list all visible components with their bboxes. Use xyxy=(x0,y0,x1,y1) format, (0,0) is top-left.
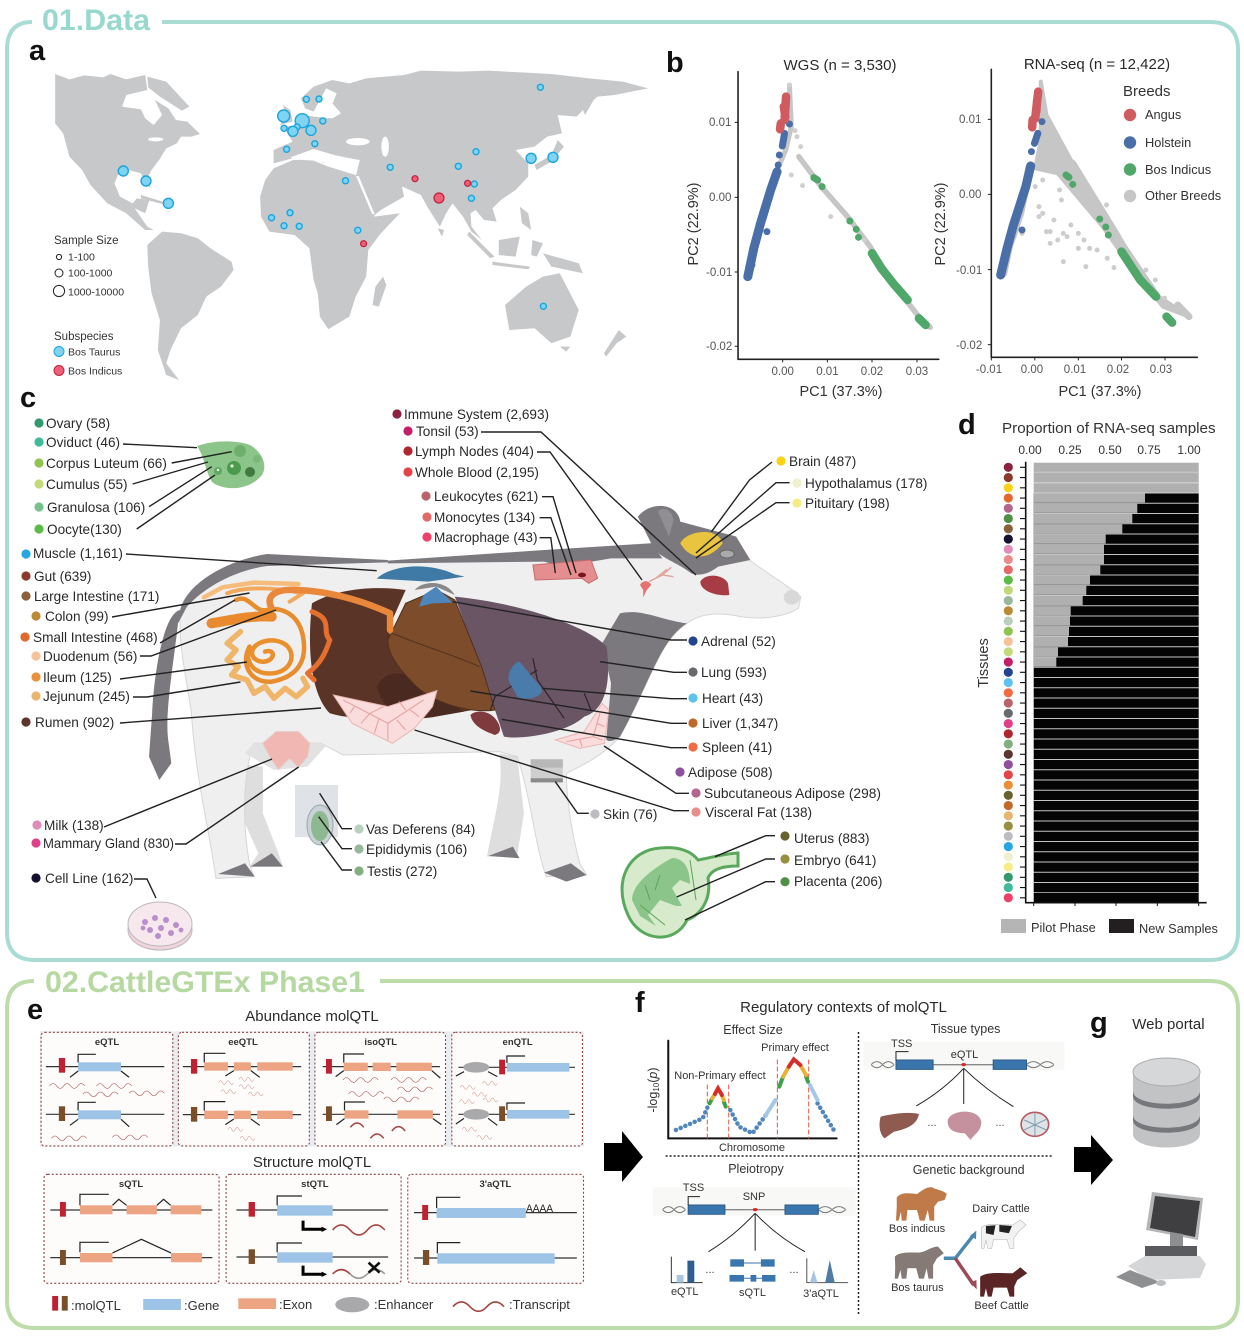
sub-panel: Tissue types: TSS xyxy=(891,1038,912,1050)
sub-panel: Tissue types: ... xyxy=(927,1117,937,1129)
label: Small Intestine: Small Intestine (468) xyxy=(33,630,158,645)
legend: breeds: Angus xyxy=(1145,107,1181,122)
box: isoQTL xyxy=(315,1032,446,1146)
legend: pilot and new samples xyxy=(1001,919,1218,936)
label: Jejunum: Jejunum (245) xyxy=(43,689,130,704)
label: Monocytes: Monocytes (134) xyxy=(434,510,535,525)
panel letter c: c xyxy=(20,382,36,414)
brain xyxy=(680,532,723,556)
box: eQTL xyxy=(41,1032,173,1146)
legend: sample size: Sample Size xyxy=(54,235,119,247)
cow body xyxy=(180,523,801,878)
WGS points and axes xyxy=(735,72,939,362)
RNA-seq tick labels: 0.01 xyxy=(1064,364,1086,376)
label: Skin: Skin (76) xyxy=(603,807,657,822)
lung xyxy=(455,597,608,737)
panel letter a: a xyxy=(29,35,46,67)
axis title Tissues: Tissues xyxy=(976,638,992,688)
label: Muscle: Muscle (1,161) xyxy=(33,546,123,561)
legend: breeds: Breeds xyxy=(1123,83,1171,100)
organ: reproductive tract xyxy=(295,785,338,845)
sub-panel: Effect Size plot: p) xyxy=(646,1067,660,1079)
plot title RNA-seq: RNA-seq (n = 12,422) xyxy=(1024,56,1170,73)
sub-panel: Genetic background: Dairy Cattle xyxy=(972,1203,1030,1215)
label: Testis: Testis (272) xyxy=(367,864,437,879)
legend: subspecies xyxy=(54,331,122,378)
panel: 02.CattleGTEx Phase1 border xyxy=(7,981,1238,1328)
label: Placenta: Placenta (206) xyxy=(794,874,882,889)
plot: RNA-seq PCA xyxy=(933,56,1197,400)
panel letter d: d xyxy=(958,409,976,441)
legend: subspecies: Bos Taurus xyxy=(68,346,120,358)
WGS axis titles xyxy=(686,182,883,400)
sub-panel: Genetic background: Beef Cattle xyxy=(974,1300,1029,1312)
RNA-seq tick labels: 0.00 xyxy=(1021,364,1043,376)
legend labels xyxy=(71,1297,570,1313)
RNA-seq tick labels xyxy=(956,114,1172,376)
ear shading and eye xyxy=(658,509,674,537)
liver xyxy=(388,590,495,711)
sub-panel: Effect Size plot xyxy=(646,1023,837,1154)
label: Uterus: Uterus (883) xyxy=(794,831,870,846)
plot title WGS: WGS (n = 3,530) xyxy=(784,57,896,74)
box titles: stQTL xyxy=(301,1179,329,1190)
top axis labels xyxy=(1018,443,1201,457)
intestines xyxy=(204,583,390,698)
abundance background xyxy=(40,1031,584,1147)
label: Vas Deferens: Vas Deferens (84) xyxy=(366,822,475,837)
subcutaneous fat xyxy=(555,703,609,748)
RNA-seq tick labels: -0.01 xyxy=(976,364,1002,376)
box: stQTL xyxy=(226,1174,401,1283)
molQTL legend swatches xyxy=(52,1296,504,1312)
sub-panel: Tissue types xyxy=(863,1022,1064,1140)
legend labels: :Gene xyxy=(184,1298,219,1313)
label: Corpus Luteum: Corpus Luteum (66) xyxy=(46,456,167,471)
box titles: enQTL xyxy=(503,1037,533,1048)
panel c: cow anatomy and tissues xyxy=(20,382,927,950)
label: Spleen: Spleen (41) xyxy=(702,740,772,755)
RNA-seq tick labels: 0.02 xyxy=(1107,364,1129,376)
label: Oviduct: Oviduct (46) xyxy=(46,435,120,450)
sub-panel: Pleiotropy: 3'aQTL xyxy=(803,1288,839,1300)
label: Brain: Brain (487) xyxy=(789,454,856,469)
top axis labels: 1.00 xyxy=(1177,443,1201,457)
udder xyxy=(263,732,310,769)
legend: sample size: 100-1000 xyxy=(68,268,113,280)
heading: Abundance molQTL: Abundance molQTL xyxy=(245,1008,379,1025)
WGS tick labels: -0.02 xyxy=(706,341,732,353)
sub-panel: Effect Size plot: ( xyxy=(646,1078,660,1083)
icon: database xyxy=(1133,1058,1200,1148)
RNA-seq tick labels: 0.03 xyxy=(1150,364,1172,376)
label: Oocyte: Oocyte(130) xyxy=(47,522,122,537)
organ: cell culture dish xyxy=(128,902,192,950)
sub-panel: Pleiotropy: Pleiotropy xyxy=(728,1162,785,1176)
sample sites: Bos indicus xyxy=(361,176,471,247)
WGS tick labels: 0.01 xyxy=(709,117,731,129)
heart xyxy=(508,662,542,699)
sample sites: Bos taurus xyxy=(118,84,558,309)
sub-panel: Tissue types: Tissue types xyxy=(931,1022,1000,1036)
sub-panel: Genetic background: Genetic background xyxy=(913,1163,1025,1177)
label: Macrophage: Macrophage (43) xyxy=(434,530,538,545)
sub-panel: Tissue types: eQTL xyxy=(951,1049,978,1061)
sub-panel: Effect Size plot: Effect Size xyxy=(723,1023,783,1037)
label: Cumulus: Cumulus (55) xyxy=(46,477,128,492)
box titles: eeQTL xyxy=(228,1037,258,1048)
sub-panel: Pleiotropy: SNP xyxy=(743,1191,765,1203)
sub-panel: Genetic background xyxy=(889,1163,1030,1312)
skin cross-section xyxy=(531,759,563,783)
label: Ileum: Ileum (125) xyxy=(43,670,112,685)
adrenal xyxy=(419,587,453,607)
heading: 01.Data: 01.Data xyxy=(42,4,150,37)
plot: WGS PCA xyxy=(686,57,939,400)
panel b: PCA scatter plots xyxy=(666,47,1221,400)
RNA-seq axis titles: PC2 (22.9%) xyxy=(933,182,949,266)
cow illustration xyxy=(149,506,801,882)
panel: 01.Data border xyxy=(7,22,1238,960)
RNA-seq points and axes xyxy=(988,69,1197,360)
label: Heart: Heart (43) xyxy=(702,691,763,706)
panel letter b: b xyxy=(666,47,684,79)
top axis labels: 0.25 xyxy=(1058,443,1082,457)
top axis labels: 0.75 xyxy=(1137,443,1161,457)
RNA-seq tick labels: 0.00 xyxy=(959,189,981,201)
sub-panel: Pleiotropy: ... xyxy=(705,1264,715,1276)
axis lines and ticks xyxy=(1022,462,1207,906)
box: eeQTL xyxy=(178,1032,309,1146)
rumen xyxy=(310,588,473,719)
label: Colon: Colon (99) xyxy=(45,609,108,624)
label: Gut: Gut (639) xyxy=(34,569,91,584)
icon: computer xyxy=(1116,1192,1206,1288)
sub-panel: Pleiotropy: sQTL xyxy=(739,1287,766,1299)
label: Duodenum: Duodenum (56) xyxy=(43,649,137,664)
label: Adipose: Adipose (508) xyxy=(688,765,773,780)
organ: uterus with embryo xyxy=(622,848,738,937)
label: Lung: Lung (593) xyxy=(701,665,767,680)
chart title: Proportion of RNA-seq samples xyxy=(1002,420,1216,437)
label: Tonsil: Tonsil (53) xyxy=(416,424,479,439)
label: Adrenal: Adrenal (52) xyxy=(701,634,776,649)
legend labels: :molQTL xyxy=(71,1298,121,1313)
label: Granulosa: Granulosa (106) xyxy=(47,500,145,515)
label: Milk: Milk (138) xyxy=(44,818,104,833)
sub-panel: Pleiotropy: TSS xyxy=(683,1182,704,1194)
label: Rumen: Rumen (902) xyxy=(35,715,114,730)
legend: sample size: 1-100 xyxy=(68,252,95,264)
label: Pituitary: Pituitary (198) xyxy=(805,496,890,511)
top axis labels: 0.00 xyxy=(1018,443,1042,457)
tissue labels xyxy=(20,407,927,889)
WGS tick labels: 0.02 xyxy=(861,366,883,378)
legend labels: :Exon xyxy=(279,1297,312,1312)
sub-panel: Pleiotropy xyxy=(653,1162,856,1300)
sub-panel: Pleiotropy: ... xyxy=(789,1264,799,1276)
box: sQTL xyxy=(44,1174,219,1283)
panel e: molQTL types xyxy=(27,994,584,1313)
label: Immune System: Immune System (2,693) xyxy=(404,407,549,422)
label: Visceral Fat: Visceral Fat (138) xyxy=(705,805,812,820)
schematics xyxy=(40,1031,584,1312)
box titles: sQTL xyxy=(119,1179,143,1190)
sub-panel: Genetic background: Bos taurus xyxy=(891,1282,944,1294)
legend: breeds xyxy=(1123,83,1221,203)
arrow: panel f to g xyxy=(1074,1135,1113,1185)
top axis labels: 0.50 xyxy=(1098,443,1122,457)
panel letter f: f xyxy=(635,987,645,1019)
stacked bars xyxy=(1034,463,1199,902)
RNA-seq axis titles xyxy=(933,182,1142,400)
sub-panel: Genetic background: Bos indicus xyxy=(889,1223,946,1235)
dashed dividers xyxy=(666,1032,1052,1315)
label: Liver: Liver (1,347) xyxy=(702,716,778,731)
heading: Web portal: Web portal xyxy=(1132,1016,1205,1033)
legend: breeds: Bos Indicus xyxy=(1145,162,1211,177)
legend: pilot and new samples: Pilot Phase xyxy=(1031,920,1096,935)
sub-panel: Effect Size plot: -log xyxy=(646,1092,660,1113)
WGS axis titles: PC1 (37.3%) xyxy=(799,384,883,400)
legend: pilot and new samples: New Samples xyxy=(1139,921,1218,936)
panel d: proportion of RNA-seq samples bar chart xyxy=(958,409,1218,936)
RNA-seq tick labels: -0.02 xyxy=(956,340,982,352)
WGS tick labels: 0.01 xyxy=(816,366,839,378)
label: Lymph Nodes: Lymph Nodes (404) xyxy=(415,444,534,459)
label: Subcutaneous Adipose: Subcutaneous Adipose (298) xyxy=(704,786,881,801)
leader lines xyxy=(104,432,790,920)
box titles: eQTL xyxy=(95,1037,119,1048)
WGS tick labels: 0.00 xyxy=(709,192,731,204)
panel g: web portal xyxy=(1090,1007,1206,1288)
panel letter g: g xyxy=(1090,1007,1108,1039)
label: Whole Blood: Whole Blood (2,195) xyxy=(415,465,539,480)
label: Cell Line: Cell Line (162) xyxy=(45,871,133,886)
box: enQTL xyxy=(452,1032,582,1146)
legend labels: :Enhancer xyxy=(374,1297,434,1312)
world map landmasses xyxy=(55,71,648,380)
WGS tick labels xyxy=(706,117,928,378)
far shading xyxy=(245,743,325,770)
label: Leukocytes: Leukocytes (621) xyxy=(434,489,538,504)
sub-panel: Effect Size plot: Primary effect xyxy=(761,1042,829,1054)
WGS tick labels: 0.00 xyxy=(772,366,794,378)
tonsil nerve shape xyxy=(640,581,651,597)
arrow: panel e to f xyxy=(604,1131,643,1182)
kidney shadow xyxy=(415,583,455,595)
sub-panel: Effect Size plot: Non-Primary effect xyxy=(674,1070,766,1082)
legend: sample size xyxy=(53,235,124,298)
poly-A text: AAAA xyxy=(526,1203,554,1215)
RNA-seq tick labels: -0.01 xyxy=(956,265,982,277)
legend: breeds: Other Breeds xyxy=(1145,188,1221,203)
heading: Structure molQTL: Structure molQTL xyxy=(253,1154,371,1171)
label: Embryo: Embryo (641) xyxy=(794,853,876,868)
box titles: isoQTL xyxy=(364,1037,397,1048)
panel f: regulatory contexts xyxy=(635,987,1064,1315)
blood vessel xyxy=(533,560,598,583)
lung fissures xyxy=(491,658,591,718)
label: Epididymis: Epididymis (106) xyxy=(366,842,467,857)
sub-panel: Pleiotropy: eQTL xyxy=(671,1286,698,1298)
lymph node xyxy=(700,576,729,595)
gray coat patches xyxy=(149,506,750,882)
heading: Regulatory contexts: Regulatory contexts of molQTL xyxy=(740,999,947,1016)
label: Mammary Gland: Mammary Gland (830) xyxy=(43,836,174,851)
WGS tick labels: -0.01 xyxy=(706,267,732,279)
sub-panel: Effect Size plot: 10 xyxy=(652,1082,661,1092)
legend: breeds: Holstein xyxy=(1145,135,1191,150)
label: Hypothalamus: Hypothalamus (178) xyxy=(805,476,927,491)
box titles xyxy=(95,1037,533,1190)
heading: 02.CattleGTEx Phase1: 02.CattleGTEx Phase1 xyxy=(45,966,365,999)
sub-panel: Tissue types: ... xyxy=(995,1117,1005,1129)
tissue colour dots xyxy=(1004,463,1013,902)
legend: subspecies: Subspecies xyxy=(54,331,114,343)
label: Ovary: Ovary (58) xyxy=(46,416,110,431)
box: 3'aQTL xyxy=(408,1174,584,1283)
box titles: 3'aQTL xyxy=(479,1179,512,1190)
visceral fat xyxy=(333,691,437,743)
legend: subspecies: Bos Indicus xyxy=(68,366,122,378)
legend labels: :Transcript xyxy=(509,1297,570,1312)
organ: ovary xyxy=(197,441,264,488)
panel a: world map of sample sites xyxy=(29,35,648,380)
spleen xyxy=(470,712,500,735)
sub-panel: Effect Size plot: Chromosome xyxy=(719,1142,785,1154)
RNA-seq tick labels: 0.01 xyxy=(959,114,981,126)
RNA-seq axis titles: PC1 (37.3%) xyxy=(1058,384,1142,400)
muscle xyxy=(377,566,465,582)
WGS tick labels: 0.03 xyxy=(906,366,928,378)
panel letter e: e xyxy=(27,994,43,1026)
label: Large Intestine: Large Intestine (171) xyxy=(34,589,159,604)
WGS axis titles: PC2 (22.9%) xyxy=(686,182,702,266)
far legs xyxy=(229,763,283,867)
legend: sample size: 1000-10000 xyxy=(68,286,124,298)
